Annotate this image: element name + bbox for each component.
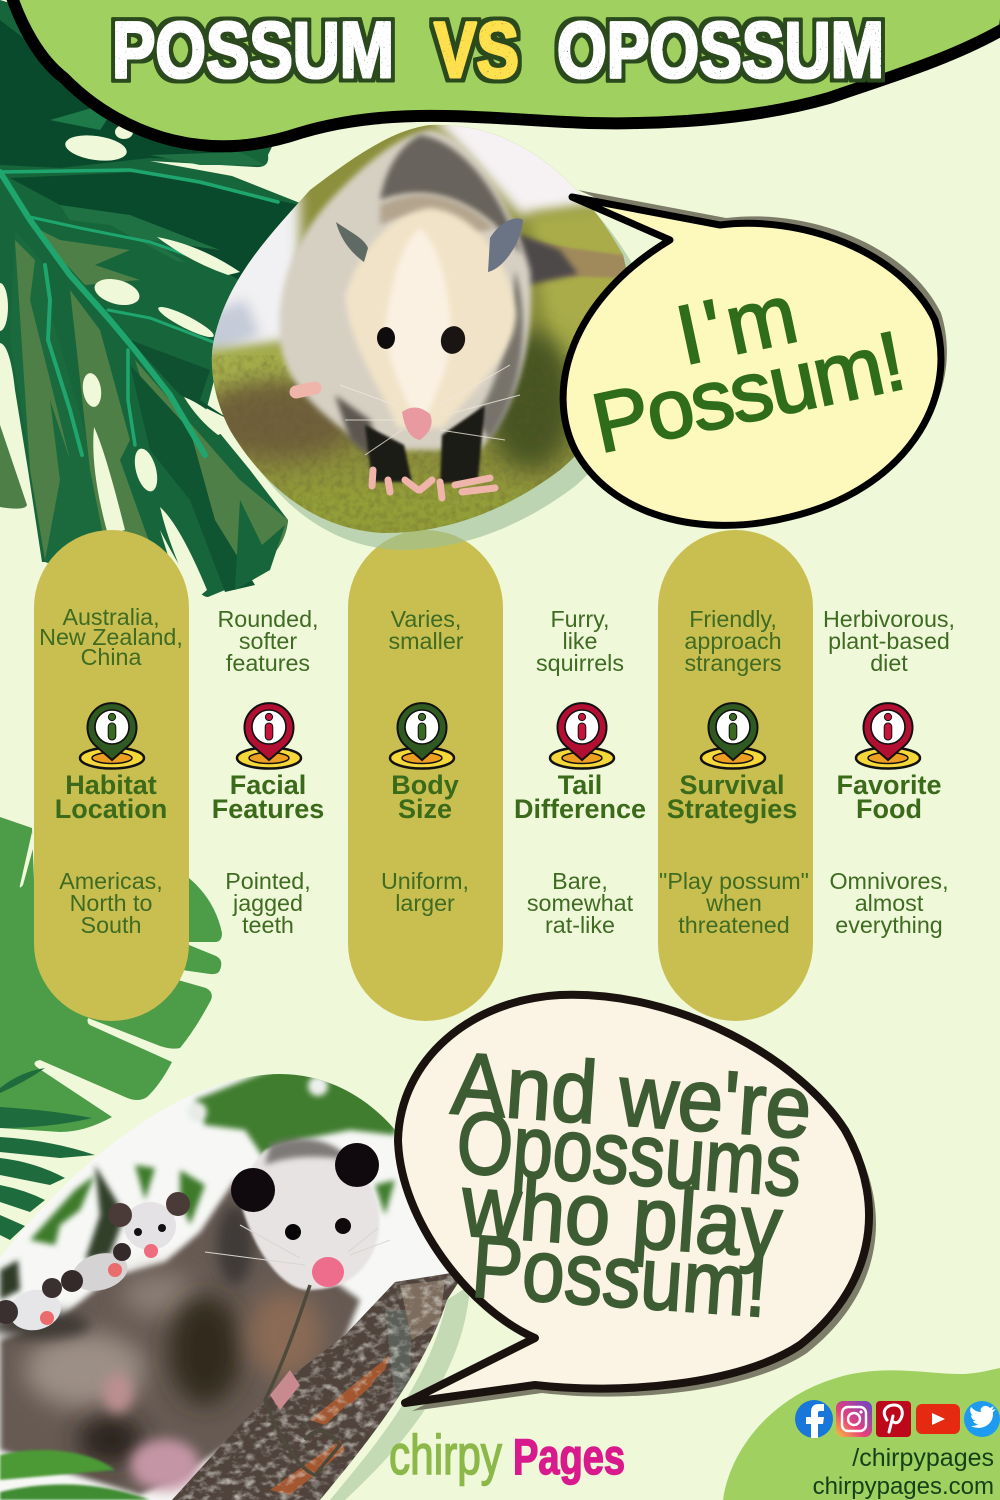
- nose: [402, 407, 432, 440]
- column: favorite food: Food: [856, 794, 922, 824]
- column: favorite food: everything: [835, 912, 943, 938]
- column: body size: [381, 606, 469, 916]
- photo: possum: [212, 124, 626, 533]
- column: favorite food: Omnivores,: [829, 868, 949, 894]
- social handle: /chirpypages: [852, 1444, 994, 1472]
- column: favorite food: Herbivorous,: [823, 606, 955, 632]
- column: facial features: softer: [239, 628, 297, 654]
- icon: facebook: [795, 1400, 833, 1438]
- nose: [312, 1257, 344, 1287]
- column: tail difference: [514, 606, 646, 938]
- title: VS: [434, 5, 519, 94]
- photo shadow: opossum: [330, 1285, 470, 1500]
- column: tail difference: Tail: [558, 770, 602, 800]
- column: favorite food: [823, 606, 955, 938]
- column: body size: Body: [391, 770, 459, 800]
- speech text: Opossums: [454, 1092, 805, 1215]
- leaf: middle left: [0, 817, 222, 1132]
- column: facial features: teeth: [242, 912, 294, 938]
- icon: instagram: [836, 1401, 872, 1437]
- speech text: And we're: [449, 1033, 815, 1157]
- website: chirpypages.com: [813, 1473, 994, 1500]
- speech text: I'm: [668, 266, 805, 383]
- column: habitat location: North to: [70, 890, 152, 916]
- column: survival strategies: when: [705, 890, 762, 916]
- photo background: [200, 115, 645, 540]
- mother body: [0, 1180, 360, 1495]
- column: habitat location: Americas,: [59, 868, 163, 894]
- speech text: Possum!: [584, 313, 913, 471]
- speech bubble: opossum: [398, 995, 876, 1411]
- column: survival strategies: Friendly,: [689, 606, 777, 632]
- body: [279, 130, 531, 450]
- title: OPOSSUM: [557, 5, 884, 94]
- tail: [540, 242, 626, 278]
- whiskers: [205, 1225, 390, 1265]
- column: habitat location: Habitat: [65, 770, 157, 800]
- column: body size: larger: [395, 890, 455, 916]
- pill columns: [34, 530, 813, 1021]
- logo: chirpy pages: [389, 1423, 625, 1486]
- column: body size: Size: [398, 794, 452, 824]
- eyes: [377, 327, 395, 349]
- speech text: who play: [458, 1155, 785, 1276]
- column: facial features: jagged: [232, 890, 303, 916]
- title banner: [8, 0, 1000, 146]
- leaf holes: [0, 125, 240, 600]
- foreground leaves: [0, 1450, 150, 1500]
- leaf: monstera top left: [0, 0, 305, 610]
- column: body size: smaller: [388, 628, 464, 654]
- tree: [170, 1265, 470, 1500]
- column: habitat location: Australia,: [62, 604, 160, 630]
- column: body size: Uniform,: [381, 868, 469, 894]
- logo: chirpy pages: chirpy: [389, 1423, 502, 1486]
- comparison rows: [39, 604, 955, 938]
- column: facial features: Pointed,: [225, 868, 311, 894]
- whiskers: [340, 365, 520, 455]
- column: survival strategies: Survival: [679, 770, 785, 800]
- column: facial features: features: [226, 650, 310, 676]
- column: facial features: Features: [212, 794, 324, 824]
- column: facial features: Facial: [230, 770, 306, 800]
- column: favorite food: diet: [870, 650, 908, 676]
- icon: youtube: [916, 1404, 960, 1434]
- column: habitat location: [39, 604, 183, 938]
- eyes: [285, 1218, 351, 1240]
- leaf: lower left stripes: [0, 1068, 95, 1240]
- column: habitat location: China: [81, 644, 141, 670]
- title: [112, 5, 884, 94]
- column: habitat location: New Zealand,: [39, 624, 183, 650]
- column: survival strategies: Strategies: [667, 794, 797, 824]
- speech text: Possum!: [469, 1216, 771, 1336]
- column: tail difference: somewhat: [527, 890, 634, 916]
- column: survival strategies: threatened: [678, 912, 790, 938]
- speech bubble: possum: [563, 190, 947, 525]
- column: favorite food: almost: [855, 890, 924, 916]
- column: favorite food: plant-based: [828, 628, 950, 654]
- baby opossums: [0, 1192, 190, 1335]
- column: favorite food: Favorite: [836, 770, 942, 800]
- column: tail difference: Bare,: [552, 868, 608, 894]
- column: tail difference: squirrels: [536, 650, 624, 676]
- column: tail difference: like: [563, 628, 597, 654]
- feet: [296, 388, 495, 498]
- column: habitat location: Location: [55, 794, 167, 824]
- column: survival strategies: approach: [684, 628, 782, 654]
- column: survival strategies: strangers: [684, 650, 782, 676]
- column: survival strategies: [659, 606, 809, 938]
- column: body size: Varies,: [391, 606, 461, 632]
- column: tail difference: rat-like: [545, 912, 615, 938]
- icon: pinterest: [876, 1401, 911, 1437]
- forelegs: [365, 425, 412, 482]
- footer panel: [723, 1368, 1000, 1500]
- paw and tail: [265, 1285, 340, 1475]
- photo foliage: [0, 1066, 405, 1300]
- photo shadow: possum: [226, 142, 654, 550]
- column: facial features: [212, 606, 324, 938]
- veins: [0, 170, 278, 455]
- column: facial features: Rounded,: [217, 606, 319, 632]
- left sub-lobe: [0, 425, 27, 509]
- column: habitat location: South: [81, 912, 141, 938]
- icon: twitter: [964, 1401, 1000, 1437]
- column: tail difference: Furry,: [550, 606, 610, 632]
- mother head: [240, 1142, 379, 1290]
- title: POSSUM: [112, 5, 394, 94]
- speech text: [449, 1033, 815, 1336]
- ears: [231, 1143, 379, 1212]
- ears: [336, 222, 368, 262]
- photo: opossum: [0, 1066, 470, 1500]
- logo: chirpy pages: Pages: [513, 1429, 625, 1485]
- column: tail difference: Difference: [514, 794, 646, 824]
- column: survival strategies: "Play possum": [659, 868, 809, 894]
- face: [345, 208, 516, 428]
